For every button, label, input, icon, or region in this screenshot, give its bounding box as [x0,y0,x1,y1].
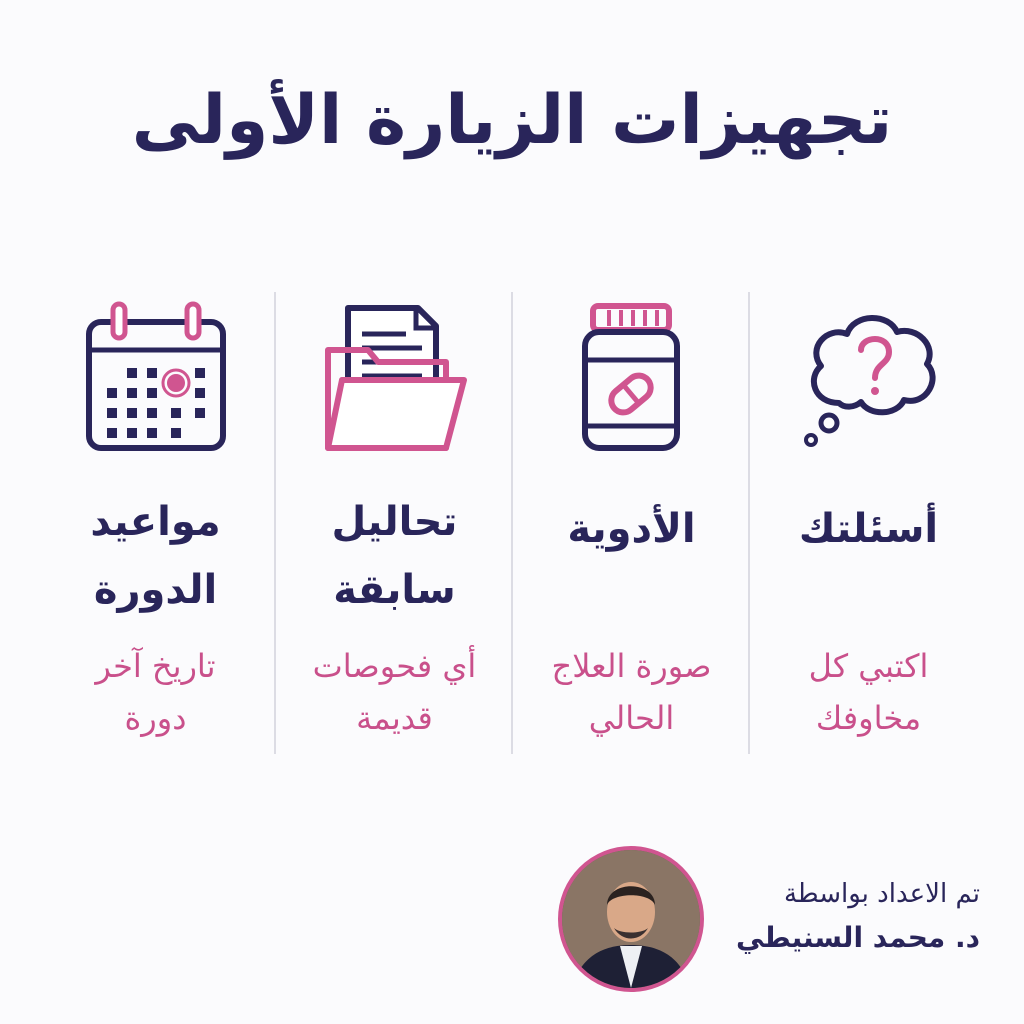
heading: مواعيد [90,499,221,545]
heading: الأدوية [567,506,696,552]
title: تجهيزات الزيارة الأولى [132,81,892,160]
subtext [809,647,928,737]
icon: folder with document [325,305,467,451]
subtext: تاريخ آخر [95,647,216,685]
heading [332,499,457,613]
heading: الدورة [94,567,217,613]
heading: تحاليل [332,499,457,545]
panel: cycle dates [86,302,226,737]
subtext: دورة [125,699,186,737]
panel: previous tests [313,305,476,737]
subtext: اكتبي كل [809,647,928,685]
icon: calendar [86,302,226,451]
heading: سابقة [333,567,456,613]
author credit: د. محمد السنيطي [736,921,980,954]
author credit [736,879,980,954]
panel: questions [799,315,938,737]
subtext: أي فحوصات [313,647,476,685]
subtext [552,647,711,737]
subtext: قديمة [356,699,433,737]
subtext: الحالي [589,699,674,737]
author credit: تم الاعداد بواسطة [784,879,980,909]
author photo [558,846,704,992]
heading: أسئلتك [799,506,938,552]
heading [90,499,221,613]
icon: pill bottle [582,303,680,451]
icon: thought bubble with question mark [804,315,936,447]
subtext [94,647,216,737]
panel: medications [552,303,711,737]
subtext: مخاوفك [816,699,921,737]
subtext: صورة العلاج [552,647,711,685]
subtext [313,645,476,737]
